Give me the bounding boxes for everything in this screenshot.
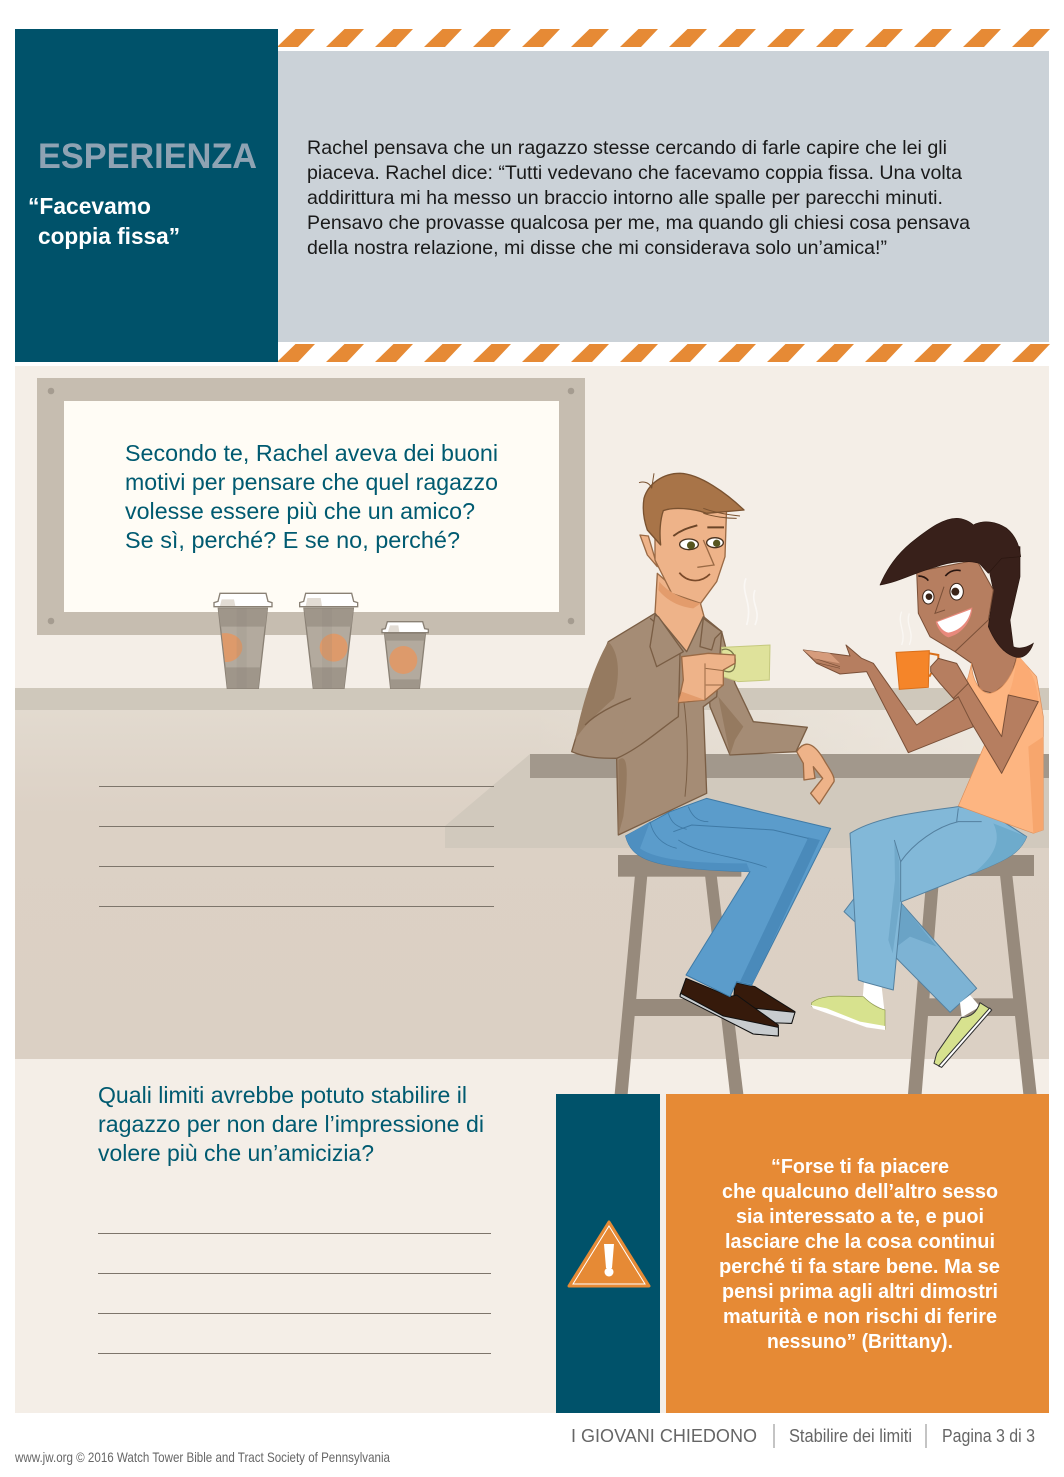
woman near arm and hand with cup <box>896 651 1038 773</box>
heading panel <box>15 29 278 362</box>
orange hazard stripes top <box>277 29 1050 47</box>
question text one <box>125 440 498 553</box>
woman front hair <box>880 518 1021 585</box>
quote text: lasciare che la cosa continui <box>725 1231 995 1253</box>
stool: woman <box>908 855 1037 1094</box>
man hair <box>639 473 744 545</box>
woman shoe right <box>934 1003 992 1067</box>
cup 2 <box>300 593 358 688</box>
man ear <box>640 535 657 567</box>
man jeans <box>626 798 831 997</box>
takeaway coffee cups <box>214 593 428 688</box>
story text: Pensavo che provasse qualcosa per me, ma quando gli chiesi cosa pensava <box>307 212 970 234</box>
quote text: che qualcuno dell’altro sesso <box>722 1181 998 1203</box>
subtitle: coppia fissa” <box>38 223 180 249</box>
answer lines two <box>98 1234 491 1354</box>
woman open hand and arm <box>803 645 973 753</box>
man shirt <box>572 613 722 835</box>
quote text: “Forse ti fa piacere <box>771 1156 949 1178</box>
steam: woman cup <box>900 612 911 645</box>
quote text: perché ti fa stare bene. Ma se <box>719 1256 1000 1278</box>
question text two: volere più che un’amicizia? <box>98 1140 374 1166</box>
story text: della nostra relazione, mi disse che mi considerava solo un’amica!” <box>307 237 887 259</box>
question text one: motivi per pensare che quel ragazzo <box>125 469 498 495</box>
panel: quote <box>666 1094 1049 1413</box>
woman back hair <box>983 543 1033 657</box>
footer <box>14 1424 1035 1465</box>
quote text: maturità e non rischi di ferire <box>723 1306 997 1328</box>
woman upper body <box>803 518 1043 833</box>
quote text: nessuno” (Brittany). <box>767 1331 953 1353</box>
woman jeans front <box>850 807 1027 990</box>
woman legs and shoes <box>811 807 1027 1067</box>
woman back leg <box>844 895 977 1012</box>
subtitle: “Facevamo <box>28 193 151 219</box>
orange hazard stripes bottom <box>277 344 1050 362</box>
cup 1 <box>214 593 272 688</box>
footer: Pagina 3 di 3 <box>942 1426 1035 1446</box>
icon: warning triangle <box>569 1222 649 1286</box>
man face <box>655 505 727 608</box>
woman face <box>917 560 993 652</box>
quote text <box>719 1156 1000 1353</box>
question text two <box>98 1082 484 1166</box>
story text: Rachel pensava che un ragazzo stesse cercando di farle capire che lei gli <box>307 137 947 159</box>
man upper body <box>572 473 834 835</box>
footer: www.jw.org © 2016 Watch Tower Bible and Tract Society of Pennsylvania <box>14 1449 390 1465</box>
cup 3 <box>382 622 428 688</box>
answer lines one <box>99 786 494 906</box>
woman shirt <box>957 655 1043 833</box>
man far arm sleeve and hand <box>703 617 834 804</box>
man legs and shoes <box>626 798 831 1036</box>
bar stools <box>615 855 1037 1094</box>
panel: warning sidebar <box>556 1094 660 1413</box>
woman neck <box>955 617 1017 693</box>
woman shoe left <box>811 996 885 1030</box>
story background panel <box>278 51 1049 342</box>
woman socks <box>863 982 980 1017</box>
quote text: sia interessato a te, e puoi <box>736 1206 984 1228</box>
footer: Stabilire dei limiti <box>789 1426 912 1446</box>
man front shoe <box>680 978 778 1036</box>
man hand <box>678 653 735 703</box>
panel: cafe scene background <box>15 366 1049 1413</box>
question text one: Se sì, perché? E se no, perché? <box>125 527 460 553</box>
steam: man cup <box>744 578 757 625</box>
footer: I GIOVANI CHIEDONO <box>571 1426 757 1446</box>
story text: piaceva. Rachel dice: “Tutti vedevano che facevamo coppia fissa. Una volta <box>307 162 962 184</box>
story text: addirittura mi ha messo un braccio intorno alle spalle per parecchi minuti. <box>307 187 943 209</box>
question text one: Secondo te, Rachel aveva dei buoni <box>125 440 498 466</box>
panel: experience header <box>15 29 1050 362</box>
question text two: Quali limiti avrebbe potuto stabilire il <box>98 1082 467 1108</box>
panel: question frame <box>37 378 585 635</box>
stool: man <box>615 855 743 1094</box>
man cup <box>722 645 770 682</box>
heading: ESPERIENZA: ESPERIENZA <box>38 137 257 176</box>
man back shoe <box>733 983 795 1023</box>
question text one: volesse essere più che un amico? <box>125 498 475 524</box>
subtitle <box>28 193 180 249</box>
story text <box>307 137 970 259</box>
man neck <box>655 573 705 653</box>
quote text: pensi prima agli altri dimostri <box>722 1281 998 1303</box>
question text two: ragazzo per non dare l’impressione di <box>98 1111 484 1137</box>
